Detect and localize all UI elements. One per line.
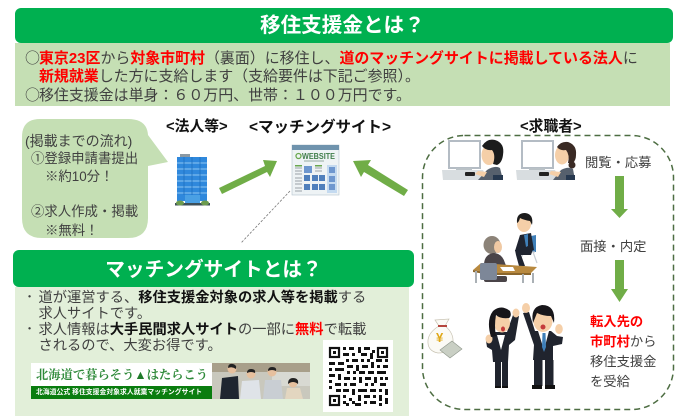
text: receive subsidy from municipality: 移住支援金 [590,354,656,369]
connector: dashed line from site to panel [241,191,290,243]
heading: what is the relocation subsidy [15,8,673,43]
banner subtitle: 北海道公式 移住支援金対象求人就業マッチングサイト [36,389,202,396]
label: job seekers: <求職者> [520,119,582,135]
arrow: job seekers to site [353,160,408,196]
text block: subsidy description: ○ [25,47,40,68]
text: receive subsidy from municipality: 転入先の [590,314,643,329]
illustration: woman at computer [516,141,576,180]
QR code [323,340,393,412]
illustration: cheering woman [486,308,520,388]
banner: Hokkaido matching site [31,363,310,399]
arrow: down to subsidy [611,260,628,302]
text block: subsidy description: ○ [25,84,40,105]
text: receive subsidy from municipality [590,314,656,389]
arrow: corporation to site [219,160,277,194]
text block: matching site description: ･ [26,322,33,338]
text: receive subsidy from municipality: 市町村から [590,334,656,349]
illustration: job interview [473,213,537,283]
label: matching site: <マッチングサイト> [249,119,391,136]
icon: office building [175,154,210,206]
callout: flow until posting: ※約10分！ [45,165,113,185]
callout: flow until posting: (掲載までの流れ) [25,132,132,148]
text block: matching site description [26,290,366,354]
callout: flow until posting: ①登録申請書提出 [31,147,138,167]
panel: matching site description background [15,287,409,416]
icon: website page: WEBSITE [302,151,335,161]
banner photo of four workers [212,363,310,399]
heading: what is the relocation subsidy: 移住支援金とは？ [260,14,425,37]
text: browse and apply: 閲覧・応募 [585,155,651,170]
text block: subsidy description: 東京23区から対象市町村（裏面）に移住し、道のマッチングサイトに掲載している法人に [39,50,638,67]
text block: matching site description: 求人情報は大手民間求人サイトの一部に無料で転載 [38,322,366,338]
icon: website page [292,145,339,195]
callout: flow until posting: ②求人作成・掲載 [31,200,138,220]
banner subtitle [31,386,212,399]
text: interview and offer: 面接・内定 [580,239,646,254]
text: receive subsidy from municipality: を受給 [590,374,630,389]
text block: subsidy description: 移住支援金は単身：６０万円、世帯：１００万円です。 [39,87,411,104]
text block: matching site description: 道が運営する、移住支援金対象の求人等を掲載する [38,290,366,306]
text block: subsidy description [25,47,638,105]
text block: matching site description: 求人サイトです。 [38,306,151,322]
banner title: 北海道で暮らそう▲はたらこう [36,368,208,382]
callout: flow until posting [22,119,168,239]
illustration: man at computer [442,140,503,180]
illustration: cheering man [522,303,563,389]
heading: what is the matching site: マッチングサイトとは？ [105,259,322,281]
illustration: money bag [428,319,462,358]
text block: matching site description: されるので、大変お得です。 [38,338,222,354]
callout: flow until posting: ※無料！ [45,219,99,239]
text block: subsidy description: 新規就業した方に支給します（支給要件は下記ご参照）。 [39,68,420,85]
arrow: down to interview [611,176,628,218]
heading: what is the matching site [13,250,414,287]
text block: matching site description: ･ [26,290,33,306]
panel: job seeker flow [422,136,674,410]
label: corporations: <法人等> [166,119,228,135]
illustration: money bag: ¥ [436,330,444,345]
panel: subsidy description background [15,43,670,106]
